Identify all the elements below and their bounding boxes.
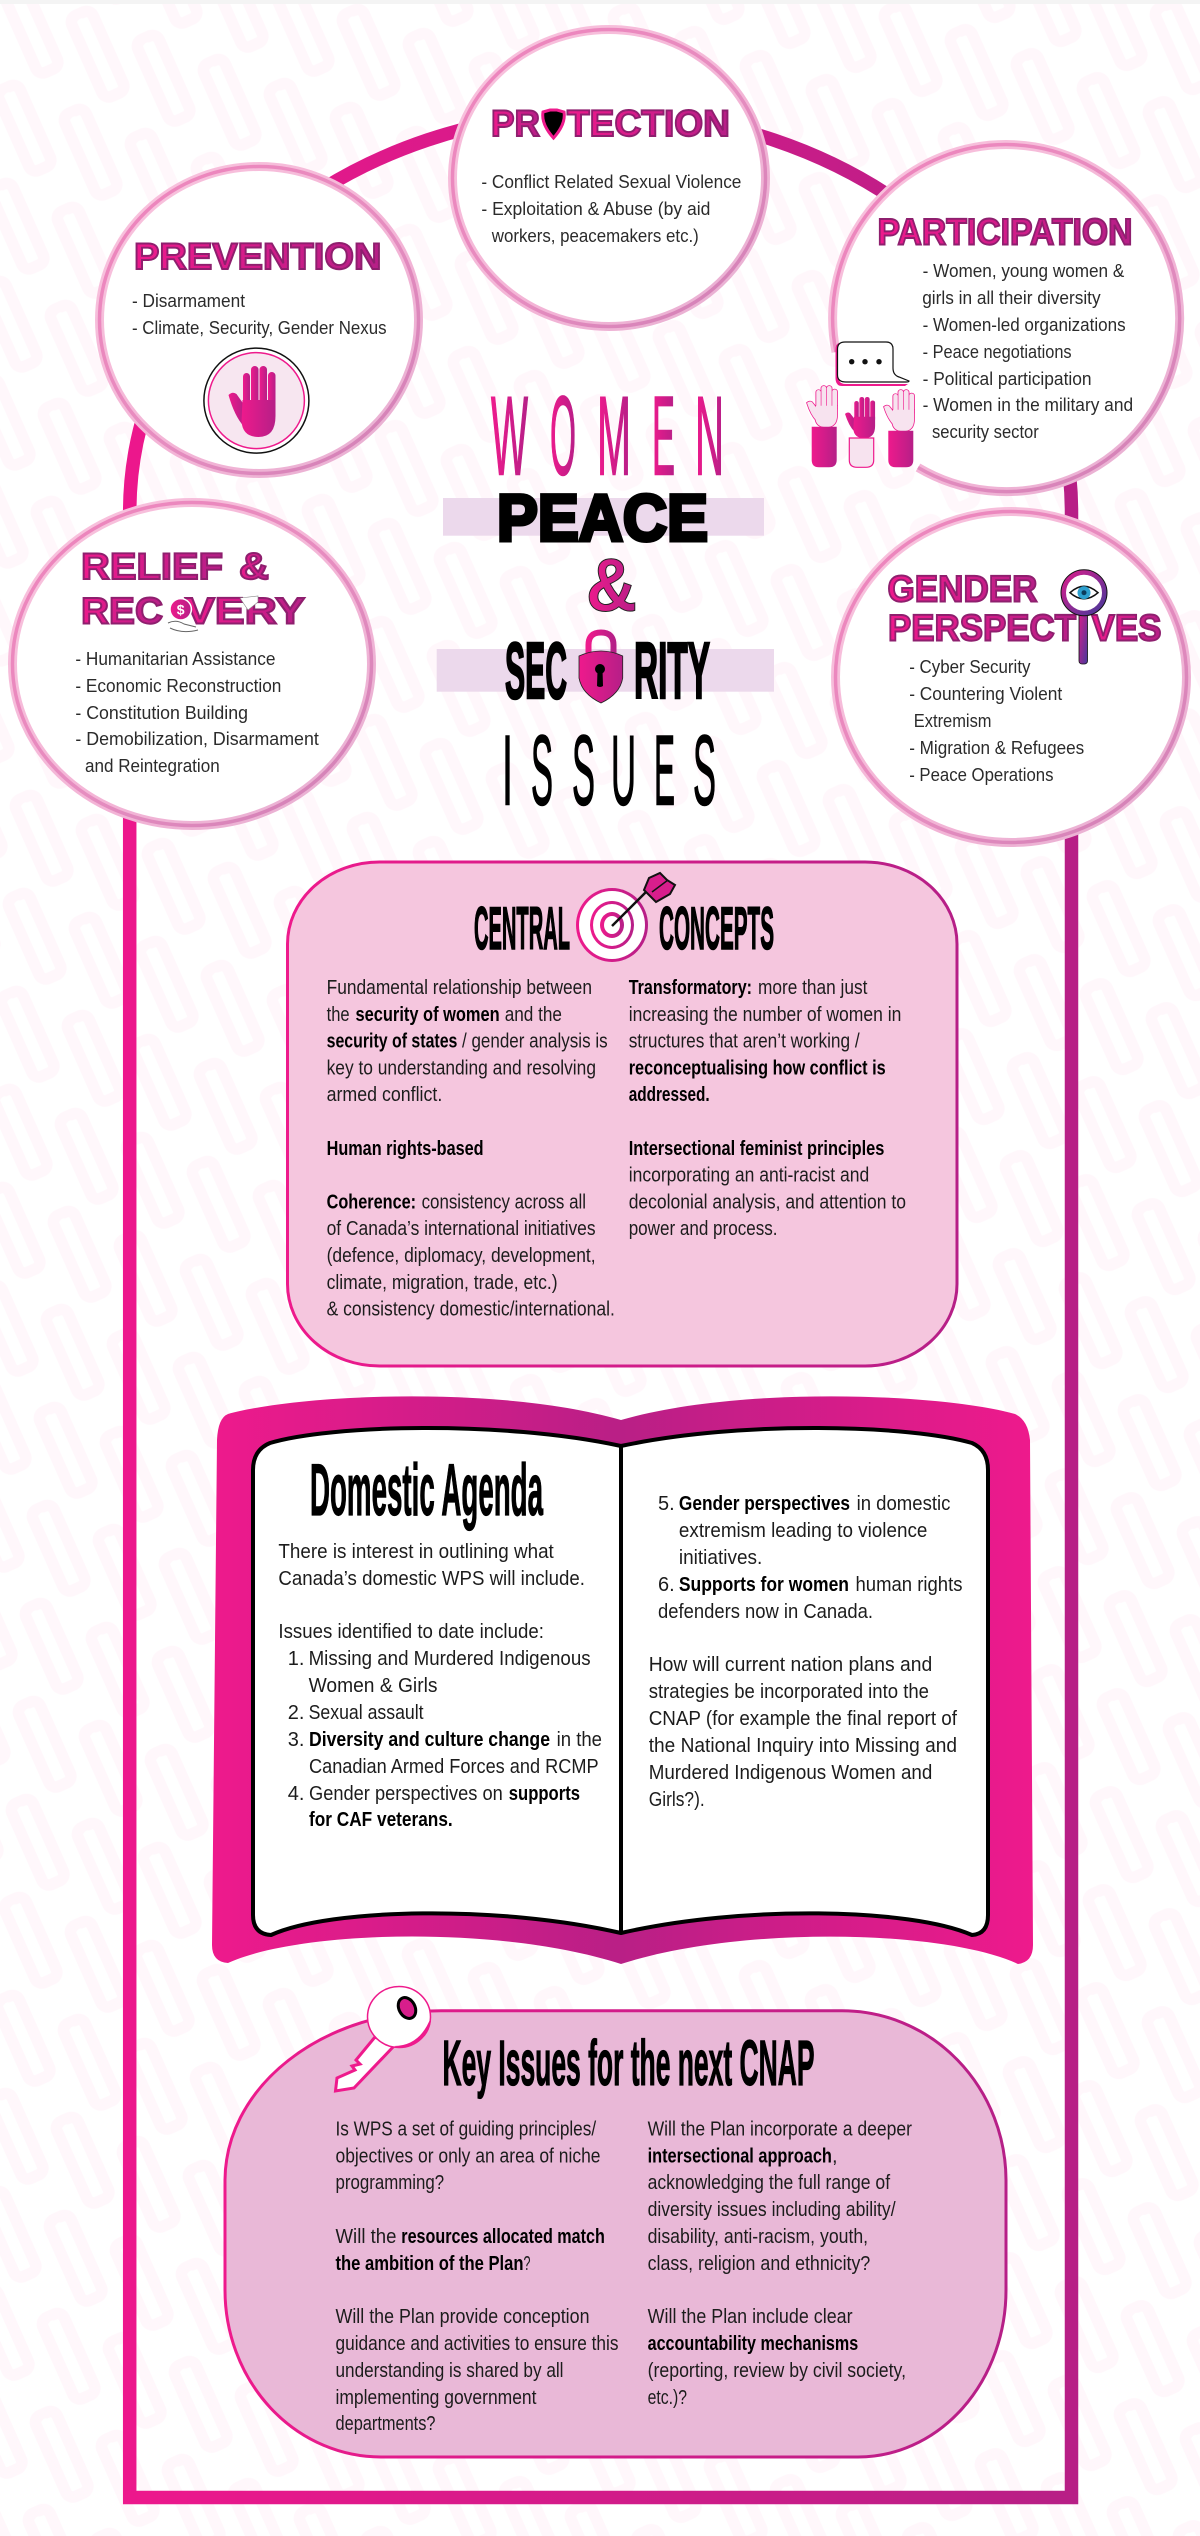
prevention list: - Climate, Security, Gender Nexus — [132, 318, 386, 338]
left column: central concepts: and the — [505, 1004, 562, 1026]
left page text: Missing and Murdered Indigenous — [309, 1648, 591, 1670]
left page text: 2. — [288, 1702, 304, 1724]
title word: issues: I — [502, 714, 513, 826]
left column: key issues: implementing government — [336, 2387, 537, 2409]
participation list: - Women in the military and — [923, 395, 1133, 415]
left column: key issues — [336, 2119, 618, 2435]
title word: security with padlock: RITY — [634, 626, 710, 715]
right column: central concepts: addressed. — [629, 1084, 710, 1106]
left page text: 3. — [288, 1729, 304, 1751]
book pages — [253, 1428, 988, 1935]
right column: key issues: acknowledging the full range of — [648, 2172, 890, 2194]
left column: key issues: objectives or only an area of niche — [336, 2145, 600, 2167]
gender list: Extremism — [914, 711, 992, 731]
left page text: Diversity and culture change — [309, 1729, 550, 1751]
panel: domestic agenda book: Domestic Agenda — [310, 1450, 544, 1531]
right column: key issues: , — [832, 2145, 838, 2167]
right page text: initiatives. — [679, 1547, 762, 1569]
left page text: Canada’s domestic WPS will include. — [278, 1568, 585, 1590]
left column: key issues: Will the — [336, 2226, 396, 2248]
right column: central concepts: increasing the number of women in — [629, 1004, 901, 1026]
icon: three raised hands — [807, 386, 914, 467]
title word: issues: E — [654, 714, 675, 826]
right column: key issues: Will the Plan include clear — [648, 2306, 853, 2328]
right page text: strategies be incorporated into the — [649, 1681, 929, 1703]
relief list: - Economic Reconstruction — [75, 676, 281, 696]
left column: central concepts: security of women — [356, 1004, 500, 1026]
panel: key issues for the next CNAP — [225, 1986, 1006, 2457]
left column: central concepts — [327, 977, 615, 1321]
participation list: - Political participation — [923, 369, 1092, 389]
relief list: and Reintegration — [85, 756, 220, 776]
right column: key issues — [648, 2119, 912, 2409]
left column: central concepts: armed conflict. — [327, 1084, 442, 1106]
arched frame connecting the five circles — [130, 112, 1071, 2497]
left column: central concepts: consistency across all — [422, 1191, 586, 1213]
left column: key issues: the ambition of the Plan — [336, 2253, 524, 2275]
title word: issues: U — [611, 714, 636, 826]
heading: protection — [491, 103, 730, 144]
icon: target and arrow — [576, 873, 675, 962]
participation list: security sector — [932, 422, 1039, 442]
gender list: - Peace Operations — [909, 765, 1054, 785]
right page text: 6. — [658, 1574, 675, 1596]
right column: central concepts: reconceptualising how conflict is — [629, 1057, 886, 1079]
main title — [437, 374, 774, 826]
protection list: - Conflict Related Sexual Violence — [481, 172, 741, 192]
right column: central concepts — [629, 977, 906, 1240]
title word: peace: PEACE — [497, 480, 708, 554]
participation list: - Peace negotiations — [923, 342, 1072, 362]
heading: gender perspectives: VES — [1092, 608, 1162, 648]
right page text: How will current nation plans and — [649, 1654, 932, 1676]
left page text — [278, 1541, 602, 1831]
prevention list: - Disarmament — [132, 291, 245, 311]
left column: key issues: resources allocated match — [401, 2226, 605, 2248]
left column: central concepts: the — [327, 1004, 350, 1026]
heading: prevention: PREVENTION — [134, 236, 382, 277]
icon: magnifying glass with eye — [1061, 570, 1107, 664]
left page text: Women & Girls — [309, 1675, 438, 1697]
right column: key issues: Will the Plan incorporate a deeper — [648, 2119, 912, 2141]
relief list: - Humanitarian Assistance — [75, 649, 275, 669]
gender list — [909, 657, 1084, 785]
left page text: in the — [557, 1729, 602, 1751]
right column: key issues: etc.)? — [648, 2387, 687, 2409]
title word: women: W — [491, 374, 528, 498]
right column: central concepts: Intersectional feminist principles — [629, 1138, 884, 1160]
icon: raised hand — [204, 348, 309, 453]
right column: central concepts: incorporating an anti-racist and — [629, 1165, 869, 1187]
gender list: - Countering Violent — [909, 684, 1062, 704]
right column: key issues: disability, anti-racism, youth, — [648, 2226, 868, 2248]
protection list: workers, peacemakers etc.) — [491, 226, 699, 246]
left column: key issues: Will the Plan provide conception — [336, 2306, 590, 2328]
left column: central concepts: & consistency domestic/international. — [327, 1299, 615, 1321]
right column: central concepts: structures that aren’t working / — [629, 1031, 860, 1053]
title word: issues — [502, 714, 716, 826]
heading: relief and recovery: $ — [177, 602, 185, 618]
left column: key issues: programming? — [336, 2172, 444, 2194]
protection list — [481, 172, 741, 246]
left page text: 1. — [288, 1648, 304, 1670]
right column: key issues: accountability mechanisms — [648, 2333, 858, 2355]
right column: central concepts: decolonial analysis, and attention to — [629, 1191, 906, 1213]
left page text: Gender perspectives on — [309, 1783, 503, 1805]
circle: relief and recovery — [12, 502, 372, 826]
heading: gender perspectives — [888, 568, 1162, 648]
book cover — [212, 1396, 1033, 1964]
right column: central concepts: more than just — [758, 977, 868, 999]
left page text: for CAF veterans. — [309, 1809, 453, 1831]
left page text: Issues identified to date include: — [278, 1621, 544, 1643]
participation list: - Women, young women & — [923, 261, 1124, 281]
main title: S — [693, 714, 716, 826]
right page text: in domestic — [857, 1493, 950, 1515]
left page text: Sexual assault — [309, 1702, 424, 1724]
left column: central concepts: Coherence: — [327, 1191, 416, 1213]
icon: key — [336, 1986, 431, 2091]
right column: key issues: class, religion and ethnicity? — [648, 2253, 870, 2275]
left column: central concepts: (defence, diplomacy, development, — [327, 1245, 596, 1267]
main title: N — [695, 374, 724, 498]
left column: key issues: Is WPS a set of guiding principles/ — [336, 2119, 596, 2141]
right column: key issues: (reporting, review by civil society, — [648, 2360, 906, 2382]
heading: protection: PR — [491, 103, 540, 144]
left column: key issues: understanding is shared by all — [336, 2360, 564, 2382]
heading: relief and recovery — [81, 546, 305, 632]
left column: central concepts: key to understanding and resolving — [327, 1057, 596, 1079]
heading: central concepts: CENTRAL — [474, 895, 570, 962]
protection list: - Exploitation & Abuse (by aid — [481, 199, 710, 219]
heading: relief and recovery: VERY — [185, 590, 305, 632]
heading: relief and recovery: & — [239, 546, 269, 587]
right page text: Girls?). — [649, 1789, 705, 1811]
right page text: Murdered Indigenous Women and — [649, 1762, 932, 1784]
panel: domestic agenda book — [212, 1396, 1033, 1964]
left column: central concepts: / gender analysis is — [462, 1031, 608, 1053]
title word: women: M — [597, 374, 631, 498]
left column: key issues: guidance and activities to ensure this — [336, 2333, 618, 2355]
right page text — [649, 1493, 962, 1811]
panel: central concepts: CONCEPTS — [659, 895, 774, 962]
title ampersand: & — [586, 543, 637, 627]
left column: central concepts: climate, migration, trade, etc.) — [327, 1272, 558, 1294]
title word: issues: S — [531, 714, 553, 826]
circle: protection — [452, 30, 766, 326]
left page text: supports — [509, 1783, 580, 1805]
left column: central concepts: security of states — [327, 1031, 457, 1053]
participation list — [922, 261, 1133, 442]
left page text: There is interest in outlining what — [278, 1541, 554, 1563]
left column: key issues: departments? — [336, 2413, 436, 2435]
gender list: - Cyber Security — [909, 657, 1030, 677]
right page text: defenders now in Canada. — [658, 1601, 873, 1623]
right page text: the National Inquiry into Missing and — [649, 1735, 957, 1757]
title word: security with padlock — [437, 626, 774, 715]
left column: key issues: ? — [524, 2253, 530, 2275]
right column: key issues: diversity issues including ability/ — [648, 2199, 896, 2221]
participation list: girls in all their diversity — [922, 288, 1101, 308]
relief list — [75, 649, 319, 776]
heading: relief and recovery: REC — [81, 590, 163, 632]
right page text: Supports for women — [679, 1574, 849, 1596]
left page text: 4. — [288, 1783, 304, 1805]
heading: gender perspectives: GENDER — [888, 568, 1038, 610]
right column: central concepts: power and process. — [629, 1218, 778, 1240]
right column: central concepts: Transformatory: — [629, 977, 752, 999]
title word: women: O — [550, 374, 576, 498]
participation list: - Women-led organizations — [923, 315, 1126, 335]
title word: women: E — [652, 374, 675, 498]
right page text: human rights — [856, 1574, 962, 1596]
right page text: 5. — [658, 1493, 675, 1515]
right page text: extremism leading to violence — [679, 1520, 927, 1542]
left column: central concepts: Fundamental relationship between — [327, 977, 592, 999]
heading: relief and recovery: RELIEF — [81, 546, 223, 587]
gender list: - Migration & Refugees — [909, 738, 1084, 758]
heading: participation: PARTICIPATION — [878, 212, 1132, 252]
circle: participation — [807, 144, 1180, 492]
heading: protection: TECTION — [567, 103, 730, 144]
right column: key issues: intersectional approach — [648, 2145, 832, 2167]
relief list: - Constitution Building — [75, 703, 248, 723]
title word: security with padlock: SEC — [505, 626, 567, 715]
heading: gender perspectives: PERSPECT — [888, 608, 1076, 648]
right page text: CNAP (for example the final report of — [649, 1708, 957, 1730]
circle: gender perspectives — [836, 512, 1186, 842]
title word: women — [491, 374, 724, 498]
panel: central concepts — [288, 862, 957, 1366]
right page text: Gender perspectives — [679, 1493, 850, 1515]
left column: central concepts: of Canada’s international initiatives — [327, 1218, 596, 1240]
prevention list — [132, 291, 386, 338]
relief list: - Demobilization, Disarmament — [75, 729, 319, 749]
left column: central concepts: Human rights-based — [327, 1138, 484, 1160]
left page text: Canadian Armed Forces and RCMP — [309, 1756, 599, 1778]
icon: speech bubble — [836, 342, 909, 386]
circle: prevention — [100, 166, 418, 474]
title word: issues: S — [572, 714, 595, 826]
